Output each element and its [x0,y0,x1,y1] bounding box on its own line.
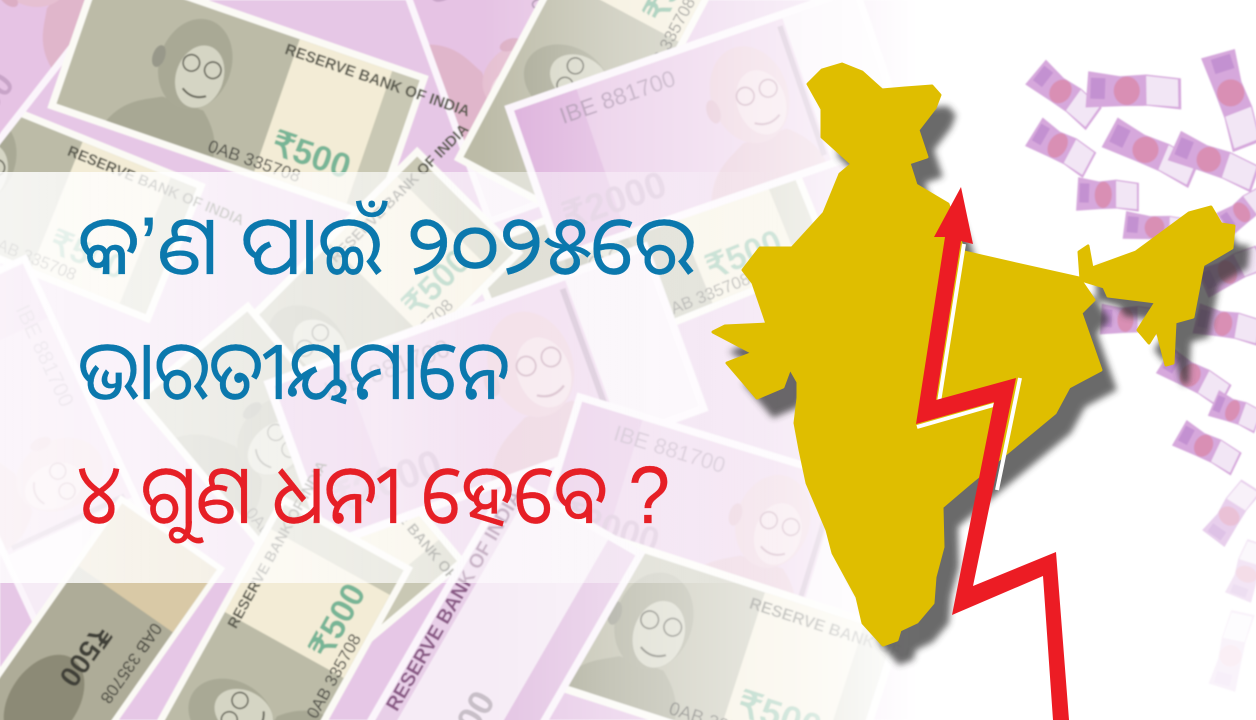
title line 2: ଭାରତୀୟମାନେ [78,326,510,417]
title line 3: ୪ ଗୁଣ ଧନୀ ହେବେ ? [78,450,670,544]
banknote: 2000 left [0,254,170,626]
banknote: flying 12 [1193,303,1256,347]
banknote: 500 right of centre [464,103,881,388]
banknote: flying 13 [1156,347,1234,409]
flying banknotes [1025,48,1256,692]
banknote: flying 5 [1102,117,1202,189]
title [78,200,695,544]
arrow highlight [917,244,1020,490]
banknote: flying 17 [1225,537,1256,603]
banknote: 500 centre [177,112,558,493]
banknote: 500 lower centre [133,302,498,696]
banknote: 500 bottom centre-left [117,452,437,720]
banknote: 2000 bottom middle [331,474,645,720]
banknote: 500 bottom left [0,495,225,720]
map: north-east [1079,207,1234,365]
banknote: 2000 lower right [531,393,919,647]
banknote: flying 14 [1208,390,1256,434]
banknote: 500 bottom right [497,514,955,720]
banknote: flying 4 [1025,117,1099,179]
banknote: flying 7 [1076,177,1140,213]
banknote: 2000 top right [504,0,912,262]
rising red arrow [916,187,1069,720]
banknote: 500 top middle [454,0,769,230]
banknote: 2000 bottom middle: RESERVE BANK OF INDIA [382,486,527,715]
white fade to the right [480,0,920,720]
banknote: flying 18 [1208,608,1256,692]
banknote: flying 2 [1086,71,1182,111]
title line 1: କ’ଣ ପାଇଁ ୨୦୨୫ରେ [78,200,695,292]
banknote: flying 9 [1215,183,1256,237]
banknote: 2000 top far left [0,0,174,190]
translucent title band [0,172,780,583]
background: banknote collage [0,0,1000,720]
banknote: flying 8 [1123,211,1197,245]
map: mainland [713,64,1101,645]
banknote: flying 3 [1201,48,1256,152]
map of India [713,64,1234,645]
banknote: flying 16 [1202,477,1256,547]
banknote: flying 10 [1196,242,1256,298]
banknote: flying 11 [1100,304,1160,336]
banknote: 2000 upper middle [371,0,629,225]
banknote: flying 15 [1172,420,1244,476]
banknote: cream 500 behind top left [0,57,251,342]
banknote: flying 1 [1025,59,1105,131]
banknote: 500 top left [47,0,476,238]
map shadow [729,84,1250,665]
banknote: 2000 centre with portrait [264,242,708,550]
banknote: flying 6 [1168,130,1256,194]
